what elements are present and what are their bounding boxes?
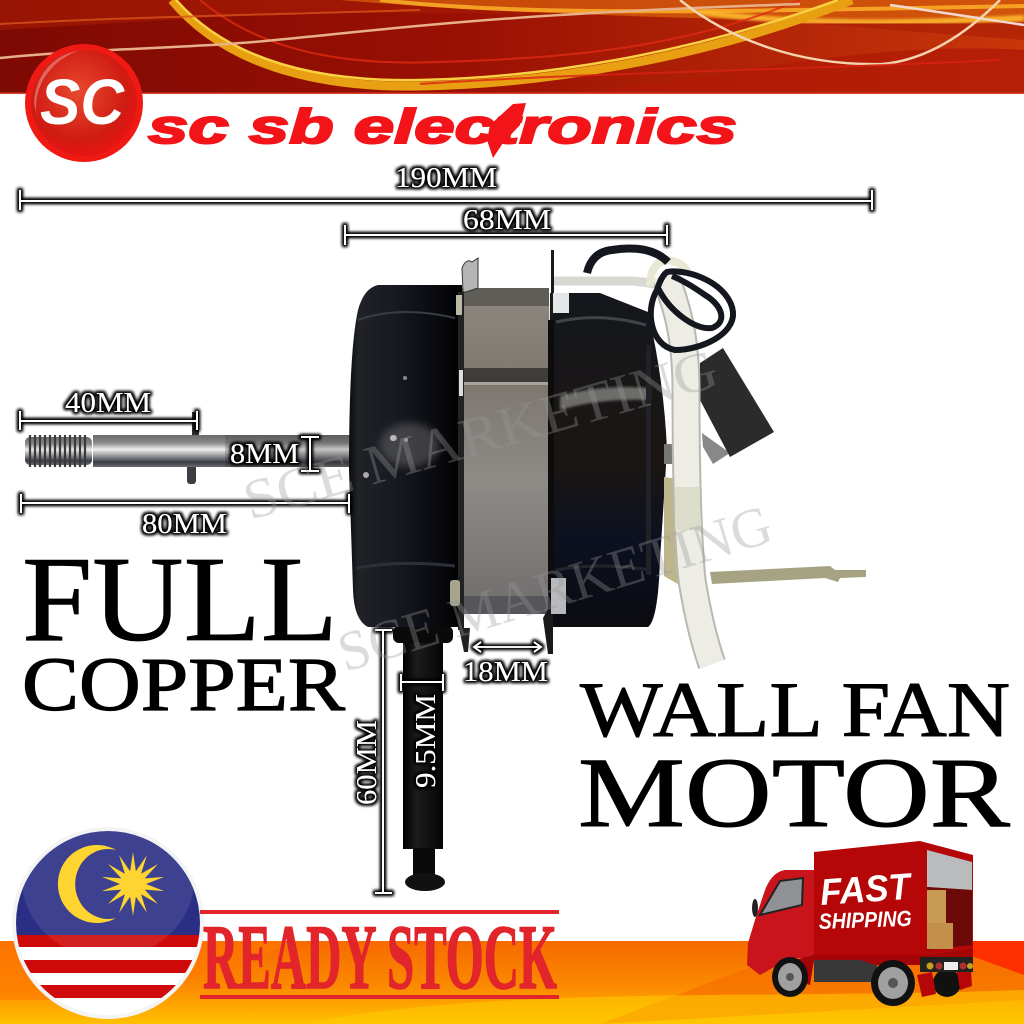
watermark: SCE MARKETING xyxy=(331,494,779,684)
lower shaft xyxy=(393,625,453,891)
footer orange band xyxy=(0,941,1024,1024)
heading: wall fan motor xyxy=(578,666,1010,848)
dimension: 18mm xyxy=(463,642,548,688)
capacitor block xyxy=(700,348,774,464)
shipping label: FAST xyxy=(819,866,915,913)
dimension: 190mm: 190MM xyxy=(395,162,497,194)
heading: wall fan motor: WALL FAN xyxy=(580,666,1010,753)
dimension: 8mm: 8MM xyxy=(230,438,299,470)
rear inner wheel xyxy=(933,969,961,997)
icon: delivery truck with fast shipping xyxy=(747,841,973,1006)
cab xyxy=(747,870,814,975)
motor illustration xyxy=(25,248,866,891)
rear lights xyxy=(920,957,973,972)
dimension: 80mm: 80MM xyxy=(142,508,227,540)
mounting bracket and terminal xyxy=(664,477,866,590)
dimension: 18mm: 18MM xyxy=(463,656,548,688)
shaft rear stub xyxy=(664,444,674,464)
rear wheel xyxy=(871,960,915,1006)
dimension: 68mm: 68MM xyxy=(463,204,551,236)
dimension: 8mm xyxy=(230,436,319,472)
shipping label: SHIPPING xyxy=(818,906,912,934)
header banner with light streaks xyxy=(0,0,1024,94)
watermark: SCE MARKETING xyxy=(236,338,725,532)
front wheel xyxy=(772,957,808,997)
company logo badge xyxy=(25,44,143,162)
ready stock stamp: READY STOCK xyxy=(203,906,557,1008)
front motor housing xyxy=(548,293,667,627)
black lead wires xyxy=(587,248,733,350)
bolts and nuts xyxy=(450,293,569,614)
cream cable ring xyxy=(650,260,688,286)
heading: full copper xyxy=(22,532,345,727)
heading: full copper: COPPER xyxy=(22,643,345,727)
dimension: 60mm: 60MM xyxy=(351,720,383,805)
cargo box xyxy=(814,841,973,955)
heading: wall fan motor: MOTOR xyxy=(578,737,1010,848)
chassis xyxy=(814,957,877,982)
dimension: 9.5mm xyxy=(400,674,444,788)
white power cable xyxy=(554,275,712,664)
watermark xyxy=(236,338,779,684)
dimension: 9.5mm: 9.5MM xyxy=(410,694,442,788)
ready stock stamp xyxy=(200,906,559,1008)
shipping label xyxy=(818,866,915,934)
rear motor housing xyxy=(349,285,462,627)
output shaft xyxy=(25,412,353,484)
icon: malaysia flag badge xyxy=(12,827,204,1019)
dimension: 40mm: 40MM xyxy=(65,387,151,419)
stator laminations xyxy=(462,288,549,614)
logo monogram: SC xyxy=(40,66,125,138)
company name wordmark: sc sb electronics xyxy=(148,101,737,154)
company name wordmark xyxy=(148,101,737,158)
mounting plates xyxy=(458,250,554,654)
heading: full copper: FULL xyxy=(22,532,338,667)
